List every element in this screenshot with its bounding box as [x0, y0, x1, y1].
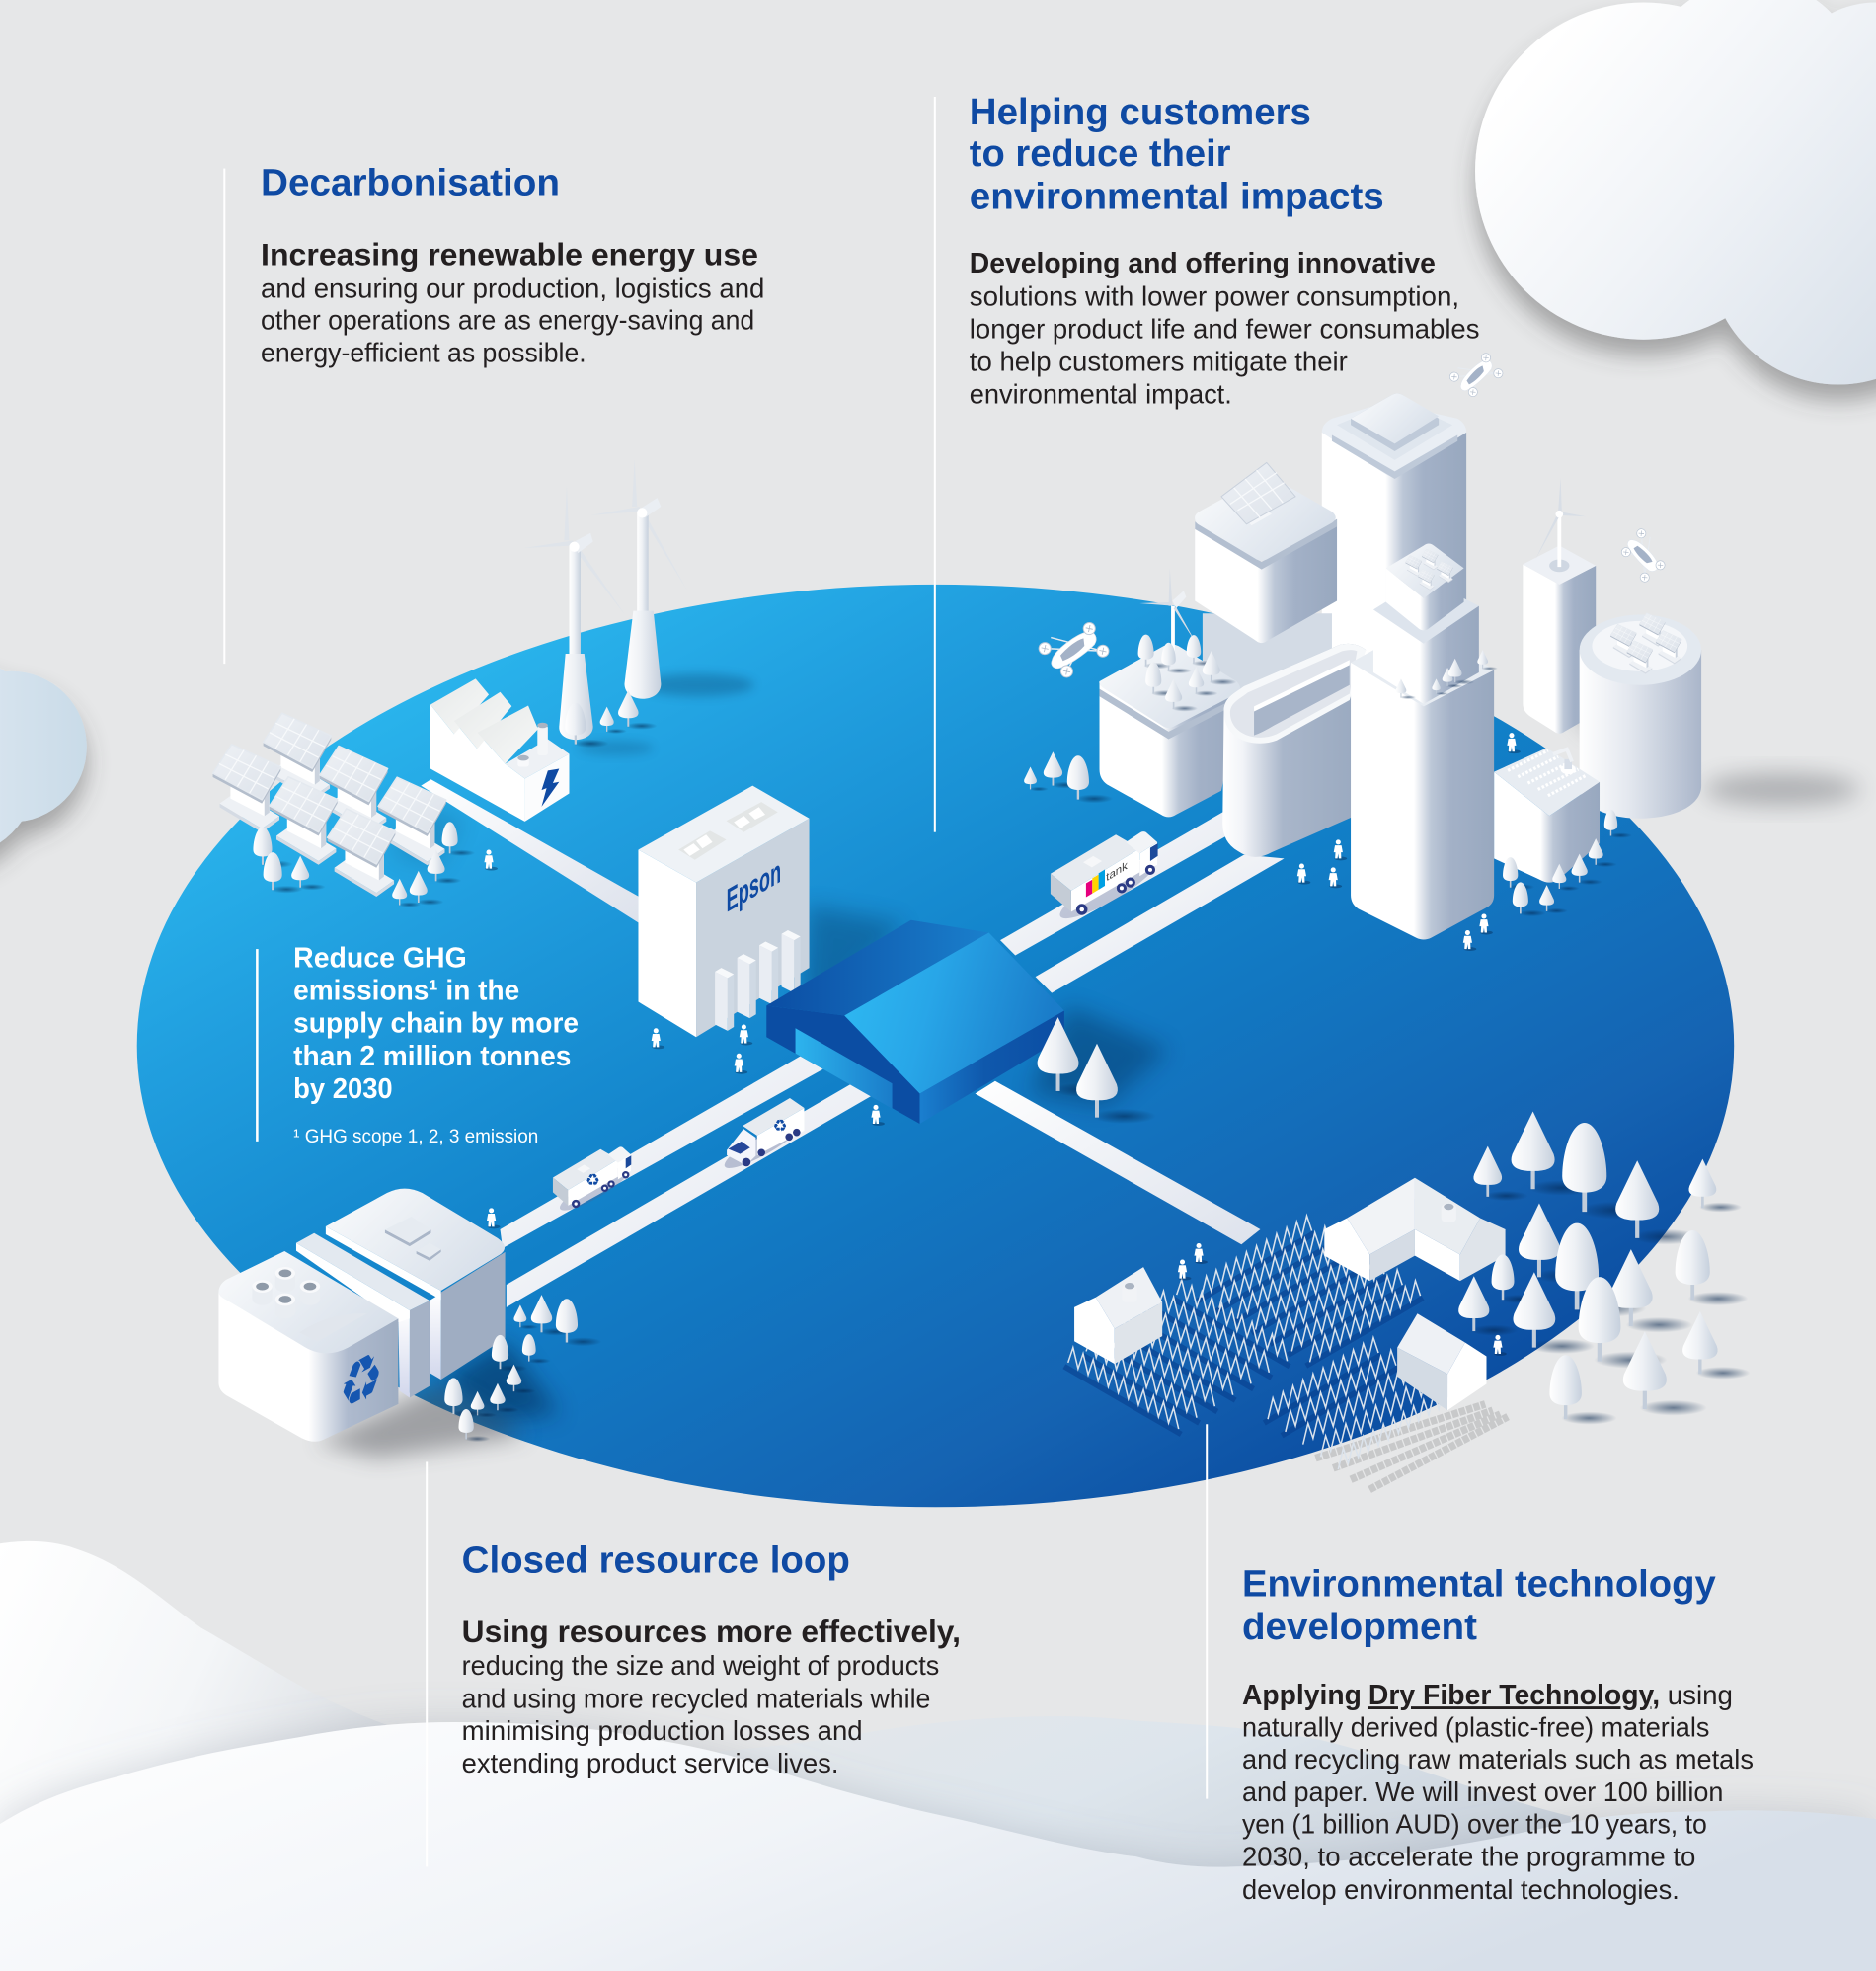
- heading: environmental technology development: development: [1242, 1606, 1477, 1648]
- flying drones: [1034, 351, 1668, 685]
- heading: helping customers: Helping customers: [970, 91, 1311, 133]
- plant roof vents: [385, 1217, 441, 1261]
- plant roof hump: [299, 1313, 367, 1342]
- trees by wind turbines: [565, 690, 658, 748]
- rooftop solar panels: [1610, 613, 1681, 674]
- heading: helping customers: to reduce their: [970, 132, 1231, 175]
- panel: decarbonisation: [261, 161, 764, 368]
- gray crop strips outside island: [1315, 1404, 1508, 1489]
- roads: [421, 779, 1285, 1307]
- hangar opening: [796, 1028, 893, 1109]
- callout: GHG target: [293, 943, 579, 1147]
- text block: closed resource loop body: extending product service lives.: [462, 1748, 838, 1778]
- text block: decarbonisation body: other operations are as energy-saving and: [261, 305, 754, 336]
- text block: decarbonisation body: energy-efficient as possible.: [261, 338, 586, 368]
- road: city lane 2: [1036, 855, 1285, 993]
- text block: environmental technology body: naturally derived (plastic-free) materials: [1242, 1712, 1709, 1743]
- text block: helping customers body: to help customers mitigate their: [970, 347, 1348, 377]
- text block: helping customers body: solutions with lower power consumption,: [970, 280, 1459, 311]
- icon: recycle symbol: ♻: [340, 1334, 383, 1428]
- rooftop solar panel: [1221, 462, 1295, 525]
- shadows on ground outside the island: [317, 654, 1859, 1459]
- icon: lightning bolt: [541, 769, 559, 807]
- truck: recycling rear view: [553, 1146, 635, 1217]
- hill: rear left: [0, 1541, 415, 1971]
- recycling plant: [218, 1189, 506, 1442]
- text block: helping customers body: environmental impact.: [970, 379, 1232, 410]
- hangar left roof: [766, 920, 989, 1016]
- text block: closed resource loop body: minimising production losses and: [462, 1715, 863, 1746]
- text block: environmental technology body: yen (1 billion AUD) over the 10 years, to: [1242, 1809, 1707, 1840]
- factory saw-tooth roof: [430, 678, 538, 763]
- text block: environmental technology body: 2030, to accelerate the programme to: [1242, 1842, 1695, 1872]
- trees by recycling plant: [444, 1295, 601, 1442]
- cloud: top right: [1475, 0, 1876, 385]
- truck: ecotank: [1051, 831, 1162, 927]
- text block: decarbonisation body: and ensuring our production, logistics and: [261, 274, 764, 304]
- panel: closed resource loop: [462, 1538, 961, 1778]
- wind turbines: [524, 459, 687, 740]
- factory chimneys: [517, 723, 548, 767]
- text block: closed resource loop body: Using resources more effectively,: [462, 1614, 961, 1649]
- hill: rear middle: [603, 1716, 1571, 1971]
- cylinder tower: [1580, 613, 1701, 819]
- trees by solar panels: [253, 822, 475, 907]
- tallest rear tower: [1322, 393, 1466, 704]
- terrace trees: [1396, 650, 1498, 699]
- heading: helping customers: [970, 91, 1384, 217]
- crop field shadow strips: [1064, 1233, 1423, 1436]
- text block: closed resource loop body: reducing the size and weight of products: [462, 1650, 939, 1681]
- plant rear block: [326, 1189, 506, 1380]
- Epson sign: Epson: [727, 852, 781, 919]
- hills: bottom background: [0, 1541, 1876, 1971]
- curved capsule building: [1222, 644, 1366, 857]
- ecotank logo: tank: [1106, 858, 1129, 884]
- rooftop solar cluster: [1405, 549, 1453, 591]
- island: blue ellipse: [137, 585, 1734, 1507]
- people: [484, 733, 1521, 1356]
- turbine 1: [524, 485, 626, 740]
- rooftop wind turbine: [1535, 478, 1586, 567]
- road: farm: [976, 1081, 1260, 1244]
- crop field 2: [1202, 1216, 1421, 1362]
- text block: environmental technology body: [1242, 1680, 1754, 1905]
- slim wind tower: [1523, 478, 1596, 734]
- house right: [1397, 1313, 1486, 1410]
- text block: closed resource loop body: and using more recycled materials while: [462, 1683, 930, 1713]
- drone right: [1619, 527, 1668, 584]
- GHG target text: supply chain by more: [293, 1008, 579, 1040]
- trees right of city: [1503, 810, 1632, 916]
- roof skylights: [678, 802, 778, 860]
- solar roof tower: [1195, 462, 1337, 704]
- text block: decarbonisation body: Increasing renewable energy use: [261, 237, 758, 273]
- farmland: [1064, 1178, 1508, 1489]
- hangar gable front: [766, 1005, 920, 1124]
- GHG target text: than 2 million tonnes: [293, 1041, 571, 1072]
- text block: environmental technology body: and paper. We will invest over 100 billion: [1242, 1776, 1723, 1807]
- plant stacks: [252, 1273, 320, 1318]
- cloud: left edge: [0, 660, 87, 858]
- truck: recycling front view: ♻: [773, 1117, 787, 1136]
- city skyline: [1099, 393, 1701, 940]
- road: recycling lane 1: [500, 1055, 824, 1248]
- heading: closed resource loop: Closed resource loop: [462, 1538, 850, 1581]
- rooftop wind turbine: [1139, 568, 1197, 651]
- central hangar building: [766, 920, 1064, 1124]
- ground shadows: [390, 673, 1169, 1420]
- hill: front: [0, 1722, 1876, 1971]
- GHG target text: Reduce GHG: [293, 943, 467, 975]
- drone top: [1448, 351, 1505, 399]
- text block: closed resource loop body: [462, 1614, 961, 1778]
- turbine 2: [590, 459, 687, 699]
- plant front block: [218, 1251, 398, 1442]
- panel: environmental technology development: [1242, 1563, 1754, 1905]
- rooftop crop building: [1494, 748, 1600, 883]
- power station factory: [430, 678, 569, 822]
- forest: [1458, 1112, 1751, 1425]
- GHG target text: [293, 943, 579, 1105]
- trees by hangar: [1038, 1017, 1156, 1124]
- text block: helping customers body: Developing and offering innovative: [970, 248, 1436, 279]
- solar panel array: [213, 713, 446, 897]
- heading: environmental technology development: [1242, 1563, 1716, 1648]
- text block: helping customers body: [970, 248, 1479, 410]
- crop field 3: [1268, 1338, 1448, 1469]
- low green roof building: [1099, 568, 1241, 817]
- facade pillars: [715, 930, 801, 1031]
- robot arm: [1553, 749, 1576, 774]
- heading: decarbonisation: Decarbonisation: [261, 161, 560, 203]
- text block: environmental technology body: Applying: [1242, 1680, 1362, 1711]
- road: city lane 1: [1000, 811, 1238, 955]
- text block: helping customers body: longer product life and fewer consumables: [970, 313, 1479, 344]
- road: recycling lane 2: [507, 1083, 873, 1307]
- crop field 1: [1068, 1280, 1288, 1429]
- hangar right wall: [920, 1010, 1064, 1124]
- heading: helping customers: environmental impacts: [970, 175, 1384, 217]
- truck: recycling front view: [720, 1098, 809, 1175]
- Epson headquarters building: [638, 786, 810, 1037]
- house left: [1074, 1267, 1162, 1364]
- panel: helping customers: [970, 91, 1479, 410]
- hangar right roof: [844, 933, 1064, 1093]
- rooftop trees: [1138, 635, 1236, 711]
- text block: environmental technology body: and recycling raw materials such as metals: [1242, 1744, 1754, 1774]
- GHG target text: by 2030: [293, 1073, 393, 1105]
- house L-shaped: [1324, 1178, 1506, 1281]
- truck: recycling rear view: ♻: [586, 1170, 600, 1189]
- text block: environmental technology body: Dry Fiber Technology,: [1368, 1680, 1660, 1711]
- text block: environmental technology body: using: [1668, 1680, 1733, 1710]
- road: solar to Epson: [421, 779, 638, 922]
- trees left of city: [1024, 751, 1113, 803]
- GHG footnote: ¹ GHG scope 1, 2, 3 emission: [293, 1127, 538, 1147]
- heading: environmental technology development: Environmental technology: [1242, 1563, 1716, 1606]
- text block: decarbonisation body: [261, 237, 764, 368]
- text block: environmental technology body: develop environmental technologies.: [1242, 1874, 1680, 1905]
- drone left: [1034, 613, 1114, 685]
- GHG target text: emissions¹ in the: [293, 976, 519, 1007]
- plant middle slab: [296, 1233, 430, 1398]
- front tall tower: [1351, 544, 1498, 940]
